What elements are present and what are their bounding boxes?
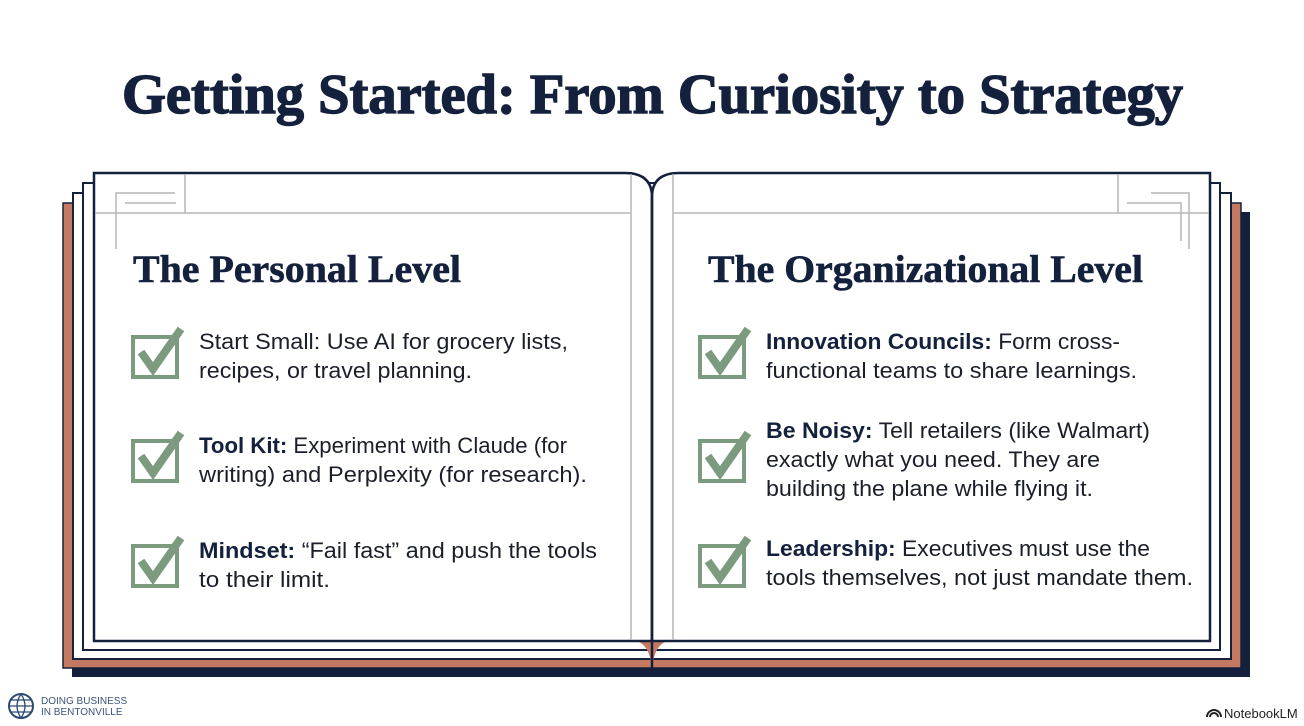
icon: checkbox [700,538,748,586]
icon: checkbox [133,329,181,377]
item: start small [133,329,568,383]
logo: doing business in bentonville: DOING BUSINESS [41,696,127,707]
item: be noisy [700,418,1150,501]
item: tool kit [133,433,587,487]
item: mindset: Mindset: “Fail fast” and push the tools [199,538,597,563]
icon: checkbox [133,433,181,481]
item: leadership: Leadership: Executives must use the [766,536,1150,561]
item: mindset: to their limit. [199,567,330,592]
logo: doing business in bentonville [9,694,127,718]
item: mindset [133,538,597,592]
logo: doing business in bentonville: IN BENTONVILLE [41,707,123,718]
panel: right page [652,173,1210,641]
item: leadership: tools themselves, not just mandate them. [766,565,1193,590]
heading: personal: The Personal Level [133,248,461,291]
item: be noisy: building the plane while flying it. [766,476,1093,501]
heading: organizational: The Organizational Level [708,248,1143,291]
icon: checkbox [700,329,748,377]
item: be noisy: Be Noisy: Tell retailers (like Walmart) [766,418,1150,443]
item: innovation councils: functional teams to share learnings. [766,358,1137,383]
item: be noisy: exactly what you need. They are [766,447,1100,472]
icon: checkbox [133,538,181,586]
title: Getting Started: From Curiosity to Strategy [122,64,1183,126]
item: leadership [700,536,1193,590]
item: start small: Start Small: Use AI for grocery lists, [199,329,568,354]
item: start small: recipes, or travel planning. [199,358,472,383]
logo: notebooklm: NotebookLM [1224,706,1298,721]
icon: checkbox [700,433,748,481]
panel: left page [94,173,652,641]
item: innovation councils: Innovation Councils: Form cross- [766,329,1120,354]
item: tool kit: writing) and Perplexity (for research). [198,462,587,487]
book [63,173,1250,677]
item: innovation councils [700,329,1137,383]
item: tool kit: Tool Kit: Experiment with Claude (for [199,433,567,458]
